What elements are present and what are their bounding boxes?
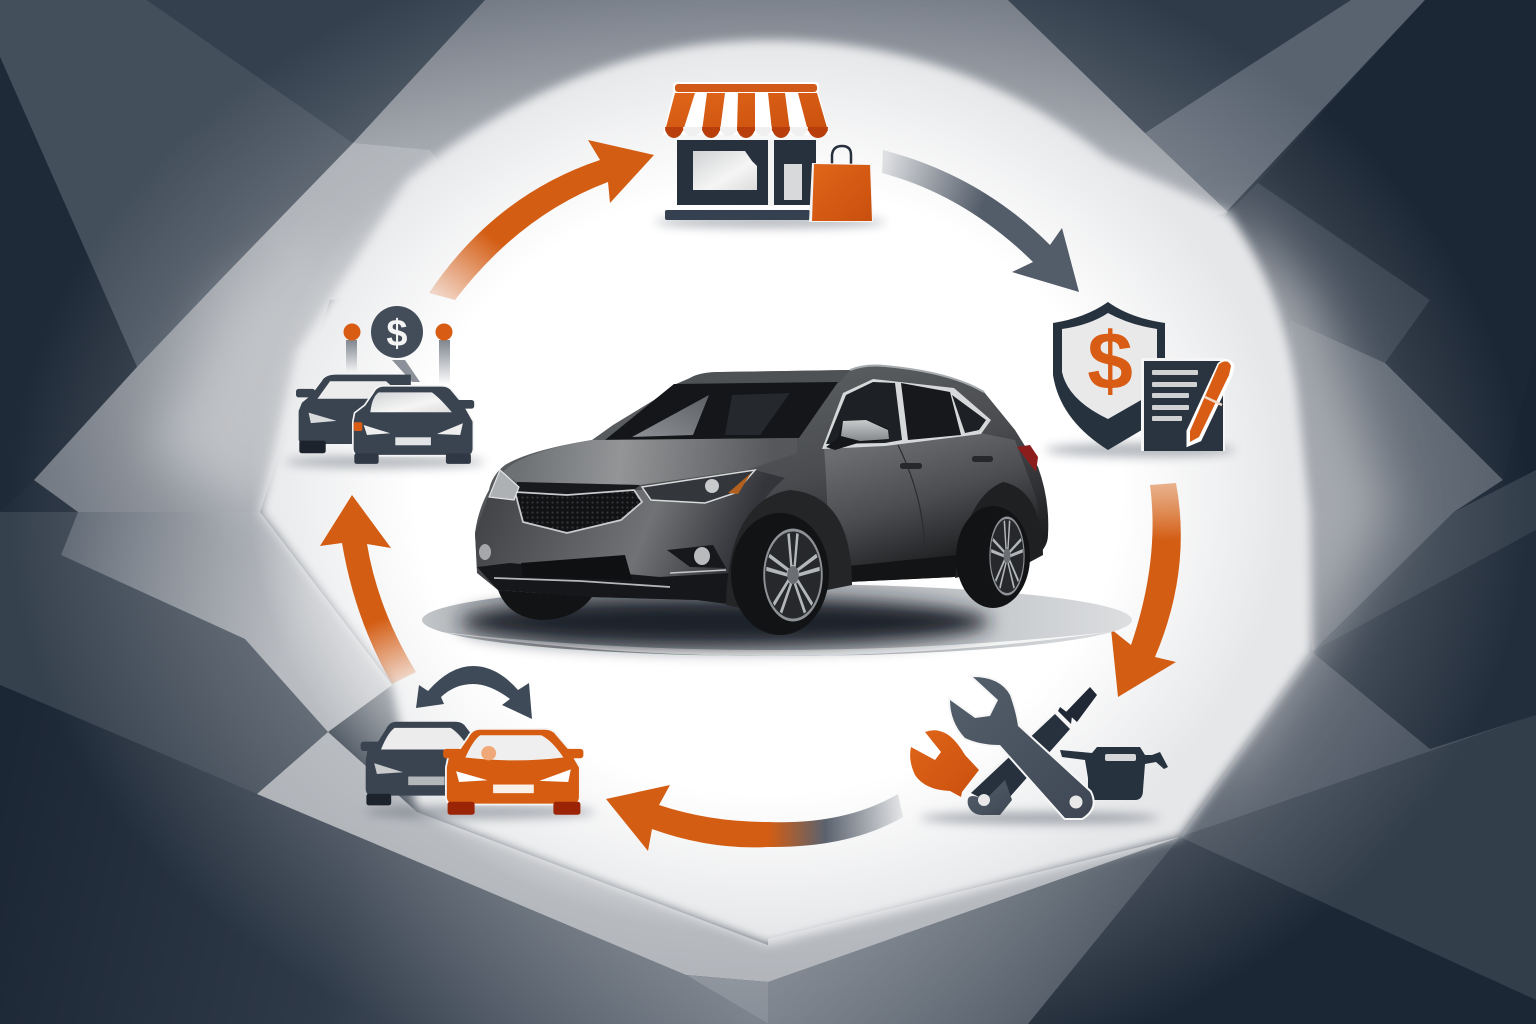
oil can xyxy=(1060,747,1168,800)
arrow: auction to dealership xyxy=(429,140,654,300)
rear wheel xyxy=(956,506,1030,608)
screwdriver xyxy=(968,687,1097,812)
document xyxy=(1141,358,1225,451)
mirror xyxy=(826,420,889,450)
black band and grille xyxy=(515,482,642,533)
swap arrow xyxy=(416,666,532,719)
wheel arches xyxy=(726,490,852,610)
front fascia xyxy=(475,470,785,580)
rear car xyxy=(296,375,411,453)
awning xyxy=(663,82,830,138)
pen xyxy=(1188,360,1233,445)
wrench xyxy=(950,677,1093,818)
icon: trade-in cars with swap arrow xyxy=(361,666,595,819)
arrow: maintenance to trade-in xyxy=(606,785,903,851)
headlights xyxy=(489,470,755,503)
icon: financing shield and signed document xyxy=(1045,302,1235,457)
orange wrench head xyxy=(910,730,979,797)
grey car xyxy=(361,722,487,805)
central SUV on platform xyxy=(422,366,1132,656)
door details xyxy=(827,445,1038,583)
shopping bag xyxy=(809,146,873,222)
silhouette xyxy=(475,366,1048,607)
arrow: financing to maintenance xyxy=(1111,483,1181,697)
icon: dealership storefront with shopping bag xyxy=(655,82,885,228)
front right wheel xyxy=(731,513,829,635)
dollar sign: $ xyxy=(1087,316,1133,407)
door panel xyxy=(824,433,1040,568)
icon: auction cars with price coin xyxy=(285,306,485,468)
coin: $ xyxy=(386,313,408,355)
hood xyxy=(502,438,797,485)
lower bumper xyxy=(477,544,751,607)
arrow: dealership to financing xyxy=(882,150,1079,292)
arrow: trade-in to auction xyxy=(320,495,416,684)
front car xyxy=(354,387,474,464)
side windows xyxy=(822,379,991,449)
bidding paddles xyxy=(344,324,452,385)
windshield xyxy=(605,382,838,440)
roof xyxy=(676,370,850,384)
orange car xyxy=(443,730,583,815)
platform xyxy=(422,584,1132,656)
coin xyxy=(371,306,423,358)
icon: maintenance tools and oil can xyxy=(910,677,1168,824)
front left tyre xyxy=(498,590,592,620)
